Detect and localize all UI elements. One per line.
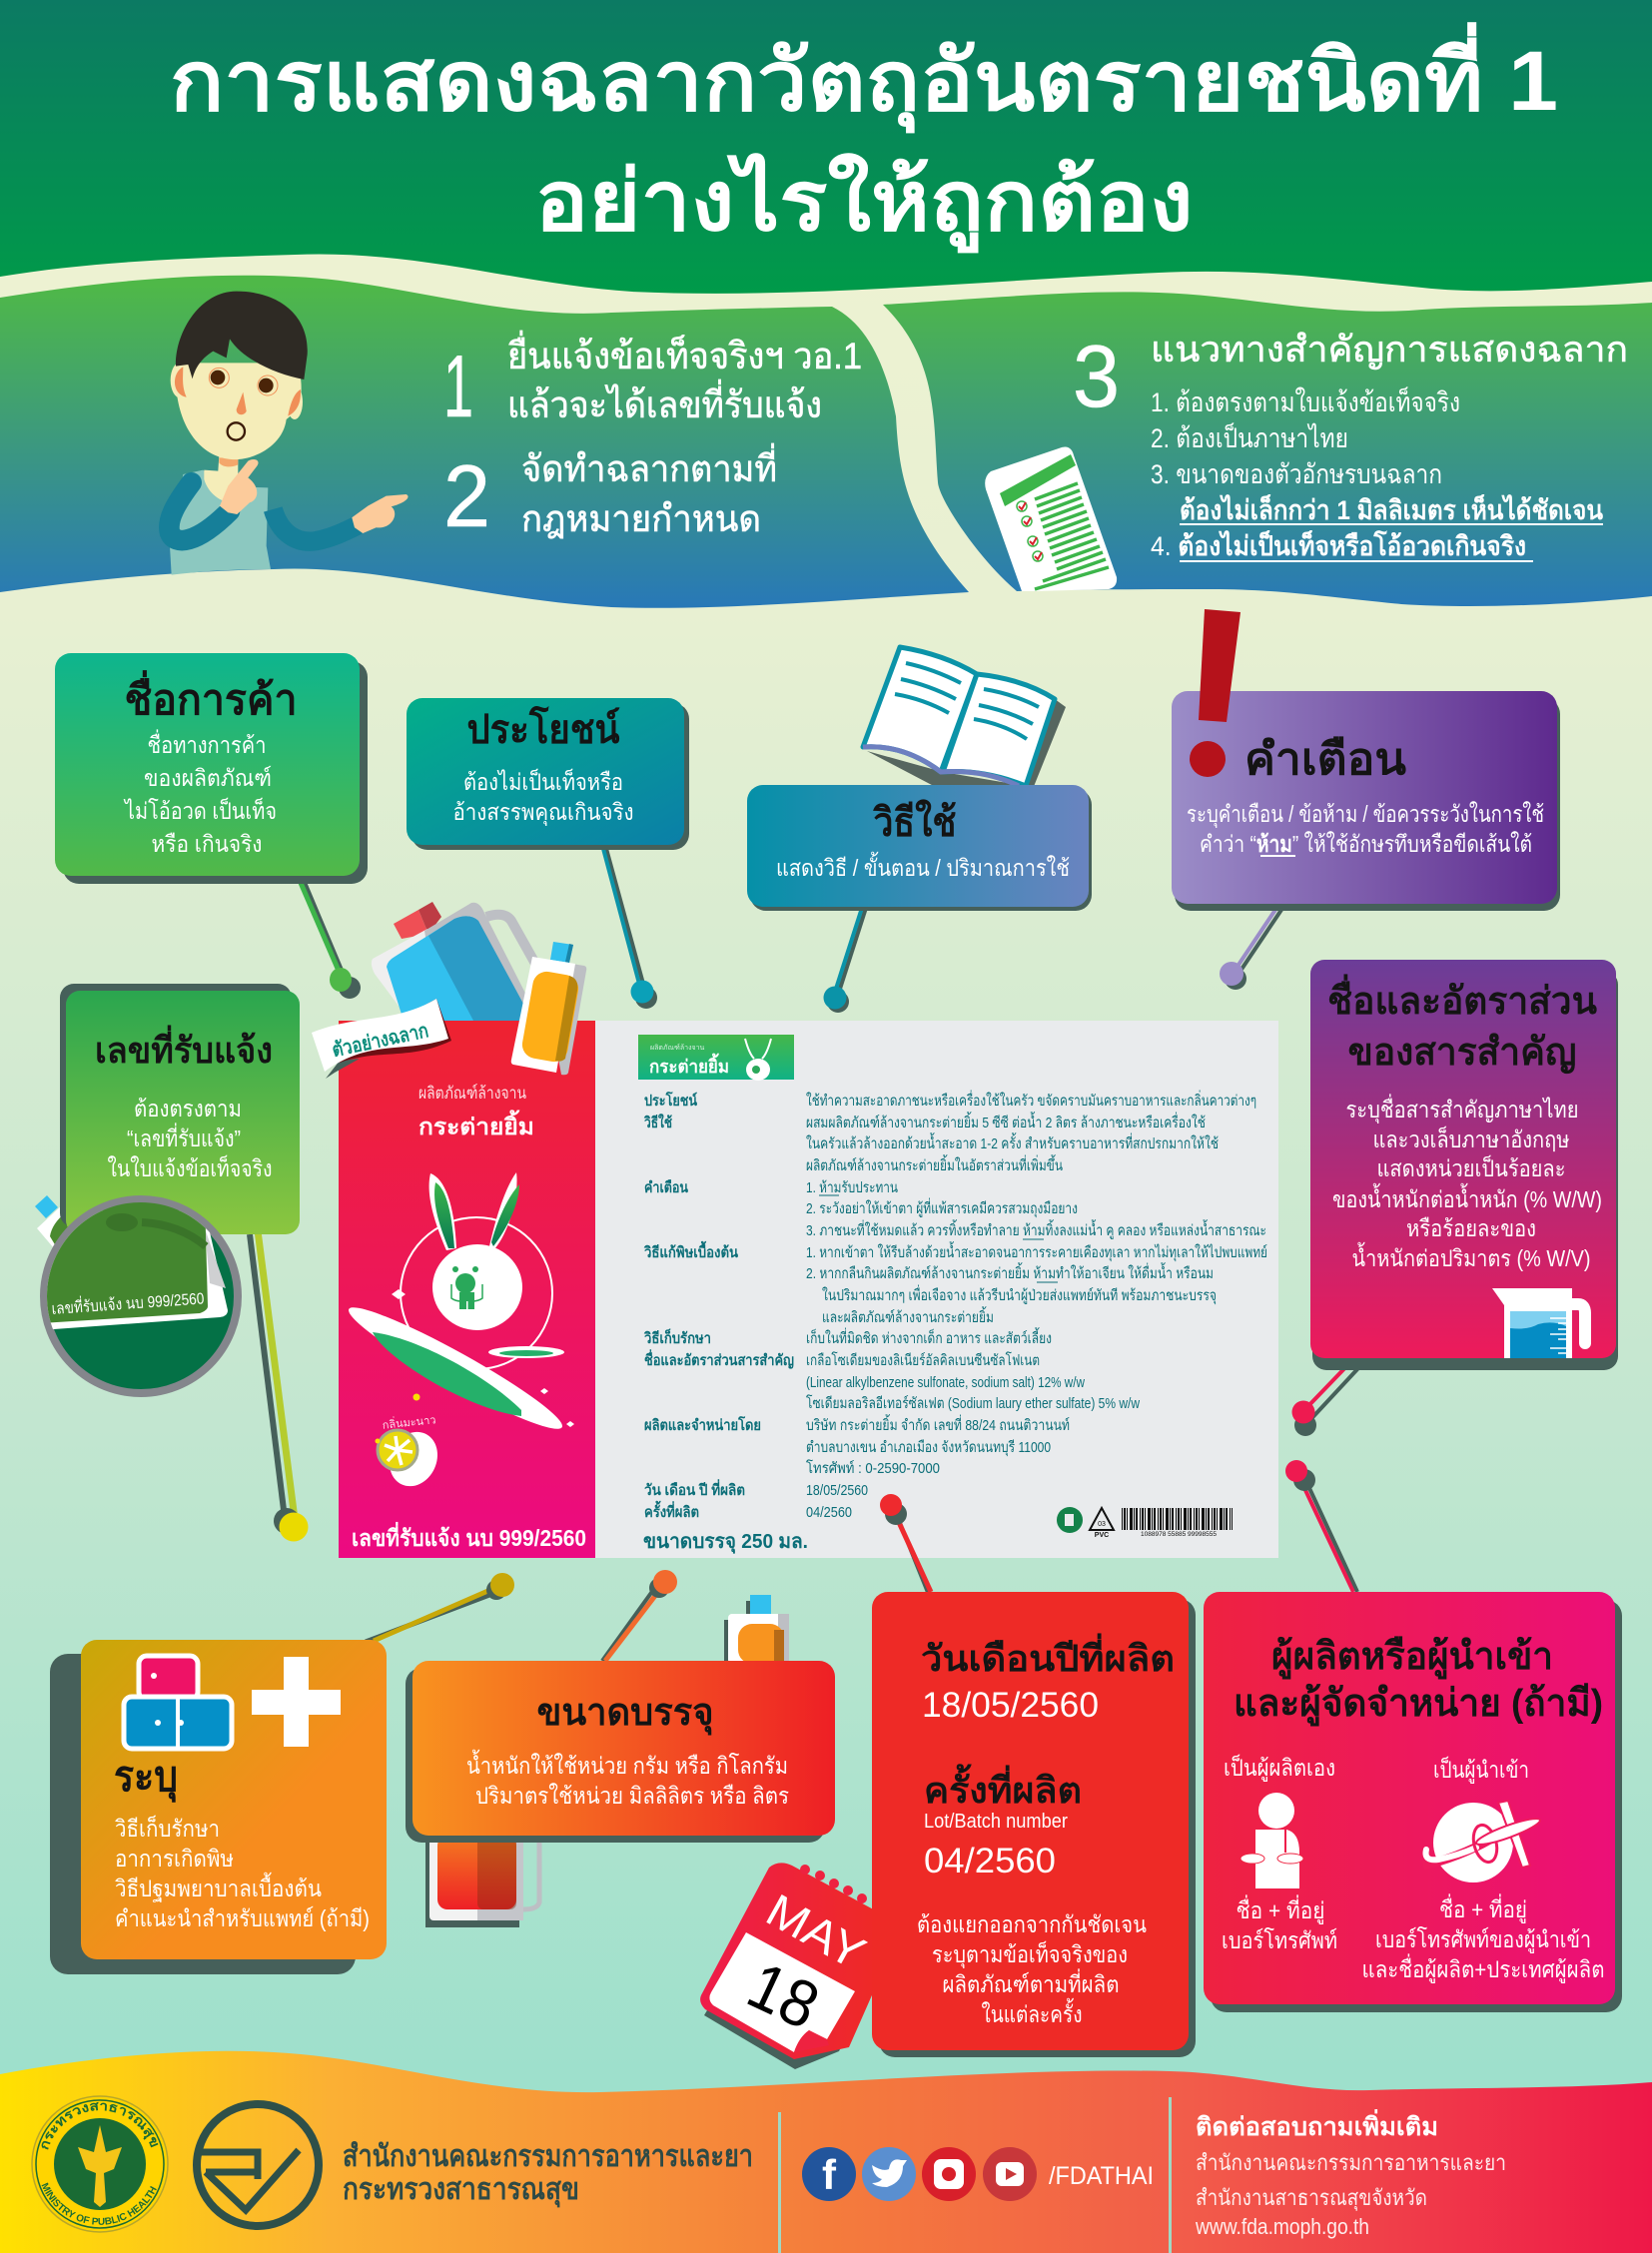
mini brand tag: กระต่ายยิ้ม	[649, 1053, 729, 1077]
icon: manufacturer person	[1240, 1793, 1303, 1888]
connector: trade name	[298, 876, 361, 999]
agency name	[343, 2140, 753, 2208]
icon: pointing character	[169, 292, 409, 575]
panel: notification number: ในใบแจ้งข้อเท็จจริง	[108, 1153, 272, 1181]
agency name: กระทรวงสาธารณสุข	[343, 2173, 579, 2208]
panel: active ingredients	[1310, 960, 1618, 1370]
logo: FDA	[197, 2104, 319, 2226]
contact details	[1195, 2109, 1506, 2239]
ingredient table: details: โซเดียมลอริลอีเทอร์ซัลเฟต (Sodium laury ether sulfate) 5% w/w	[806, 1394, 1140, 1412]
panel: manufacturer or importer: เป็นผู้นำเข้า	[1433, 1755, 1529, 1784]
panel: step 3 guidelines	[883, 292, 1652, 606]
panel: manufacturing date and batch: ต้องแยกออกจากกันชัดเจน	[917, 1911, 1147, 1937]
icon: globe with airplane	[1423, 1801, 1542, 1882]
ingredient table: details: 3. ภาชนะที่ใช้หมดแล้ว ควรทิ้งหรือทำลาย ห้ามทิ้งลงแม่น้ำ คู คลอง หรือแหล่งน้ำสาธารณะ	[806, 1219, 1266, 1239]
panel: steps 1 and 2	[0, 276, 969, 608]
icon: bottle above net content	[724, 1595, 789, 1664]
connector: benefit	[602, 845, 657, 1009]
panel: directions: แสดงวิธี / ขั้นตอน / ปริมาณการใช้	[776, 852, 1070, 881]
guideline list: 3. ขนาดของตัวอักษรบนฉลาก	[1151, 459, 1442, 489]
ingredient table: details	[806, 1090, 1267, 1521]
panel: warning: ระบุคำเตือน / ข้อห้าม / ข้อควรระวังในการใช้	[1187, 801, 1544, 828]
panel: warning: คำว่า “ห้าม” ให้ใช้อักษรทึบหรือขีดเส้นใต้	[1200, 831, 1532, 857]
panel: directions: วิธีใช้	[873, 799, 957, 845]
label: red front panel	[339, 1021, 595, 1558]
ingredient table: details: 2. ระวังอย่าให้เข้าตา ผู้ที่แพ้สารเคมีควรสวมถุงมือยาง	[806, 1197, 1078, 1218]
icon: rabbit on plate	[342, 1172, 574, 1441]
icon: tear-off calendar: 18	[737, 1947, 830, 2043]
panel: net content	[406, 1661, 835, 1843]
logo: ministry of public health: กระทรวงสาธารณสุข	[42, 2101, 158, 2149]
icon: magnifier on registration number: เลขที่รับแจ้ง นบ 999/2560	[51, 1286, 205, 1318]
ingredient table: details: 1. ห้ามรับประทาน	[806, 1179, 898, 1196]
ingredient table: details: เกลือโซเดียมของลิเนียร์อัลคิลเบนซีนซัลโฟเนต	[806, 1351, 1040, 1369]
panel: active ingredients: และวงเล็บภาษาอังกฤษ	[1372, 1125, 1570, 1152]
ingredient table: details: เก็บในที่มิดชิด ห่างจากเด็ก อาหาร และสัตว์เลี้ยง	[806, 1327, 1052, 1347]
panel: active ingredients: ระบุชื่อสารสำคัญภาษาไทย	[1346, 1094, 1578, 1124]
icon: tear-off calendar: MAY	[758, 1883, 874, 1979]
connector: manufacturer	[1285, 1460, 1357, 1592]
icon: recycling marks and barcode: 1088978 55885 99998555	[1141, 1531, 1217, 1538]
panel: manufacturer or importer: ผู้ผลิตหรือผู้นำเข้า	[1271, 1636, 1553, 1680]
panel: manufacturer or importer: เบอร์โทรศัพท์ของผู้นำเข้า	[1375, 1926, 1591, 1953]
icon: recycling marks and barcode: PVC	[1095, 1532, 1109, 1539]
step 2 number: 2	[443, 446, 490, 545]
panel: net content: ขนาดบรรจุ	[537, 1692, 713, 1736]
step 2 text	[521, 442, 777, 539]
step 1 text: ยื่นแจ้งข้อเท็จจริงฯ วอ.1	[507, 330, 862, 376]
panel: manufacturer or importer: ชื่อ + ที่อยู่	[1237, 1894, 1324, 1924]
panel: trade name: ไม่โอ้อวด เป็นเท็จ	[123, 796, 277, 824]
mini brand tag	[638, 1035, 794, 1081]
icon: small orange bottle	[511, 942, 586, 1075]
step 3 number: 3	[1073, 327, 1120, 425]
ingredient table: details: โทรศัพท์ : 0-2590-7000	[806, 1459, 940, 1477]
icon: tear-off calendar	[700, 1863, 879, 2069]
ingredient table: details: 18/05/2560	[806, 1482, 868, 1499]
ingredient table: headings: วิธีแก้พิษเบื้องต้น	[643, 1240, 739, 1261]
panel: manufacturing date and batch: 04/2560	[924, 1842, 1056, 1880]
ingredient table: details: (Linear alkylbenzene sulfonate, sodium salt) 12% w/w	[806, 1374, 1085, 1391]
contact details: สำนักงานคณะกรรมการอาหารและยา	[1196, 2150, 1506, 2175]
contact details: www.fda.moph.go.th	[1195, 2214, 1369, 2239]
step 3 heading: แนวทางสำคัญการแสดงฉลาก	[1151, 329, 1628, 370]
panel: manufacturer or importer: ชื่อ + ที่อยู่	[1439, 1893, 1527, 1923]
step 2 text: กฎหมายกำหนด	[521, 498, 761, 539]
icon: recycling marks and barcode: 03	[1098, 1521, 1106, 1528]
ribbon: sample label tag: ตัวอย่างฉลาก	[331, 1020, 430, 1062]
ingredient table: headings: วัน เดือน ปี ที่ผลิต	[644, 1479, 745, 1499]
ingredient table: headings: ครั้งที่ผลิต	[644, 1500, 699, 1521]
panel: other information: คำแนะนำสำหรับแพทย์ (ถ้ามี)	[115, 1905, 370, 1931]
label: red front panel: กระต่ายยิ้ม	[418, 1110, 534, 1139]
ingredient table: details: ตำบลบางเขน อำเภอเมือง จังหวัดนนทบุรี 11000	[806, 1439, 1051, 1457]
panel: net content: ปริมาตรใช้หน่วย มิลลิลิตร หรือ ลิตร	[475, 1783, 789, 1809]
icon: detergent jug	[372, 902, 539, 1021]
guideline list: 4. ต้องไม่เป็นเท็จหรือโอ้อวดเกินจริง	[1151, 528, 1526, 561]
connector: active ingredients	[1292, 1357, 1358, 1436]
panel: warning: คำเตือน	[1244, 735, 1406, 784]
panel: trade name: หรือ เกินจริง	[152, 831, 262, 857]
panel: manufacturing date and batch: ผลิตภัณฑ์ตามที่ผลิต	[943, 1968, 1119, 1997]
ingredient table: details: ผสมผลิตภัณฑ์ล้างจานกระต่ายยิ้ม 5 ซีซี ต่อน้ำ 2 ลิตร ล้างภาชนะหรือเครื่องใช้	[806, 1112, 1206, 1131]
agency name: สำนักงานคณะกรรมการอาหารและยา	[343, 2140, 753, 2173]
panel: active ingredients: ของน้ำหนักต่อน้ำหนัก (% W/W)	[1332, 1183, 1602, 1212]
title	[170, 22, 1558, 254]
ingredient table: details: ใช้ทำความสะอาดภาชนะหรือเครื่องใช้ในครัว ขจัดคราบมันคราบอาหารและกลิ่นคาวต่างๆ	[806, 1090, 1256, 1110]
step 1 text	[507, 330, 862, 425]
ingredient table: details: ในครัวแล้วล้างออกด้วยน้ำสะอาด 1-2 ครั้ง สำหรับคราบอาหารที่สกปรกมากให้ใช้	[806, 1132, 1219, 1152]
panel: directions	[747, 785, 1092, 911]
mini brand tag: ผลิตภัณฑ์ล้างจาน	[650, 1044, 705, 1052]
social media icons	[802, 2147, 1037, 2201]
icon: measuring jug	[1492, 1288, 1585, 1358]
label: red front panel: เลขที่รับแจ้ง นบ 999/2560	[352, 1521, 586, 1551]
guideline list	[1151, 384, 1603, 562]
sample label	[312, 902, 1278, 1558]
ingredient table: details: 1. หากเข้าตา ให้รีบล้างด้วยน้ำสะอาดจนอาการระคายเคืองทุเลา หากไม่ทุเลาให้ไปพบแพทย์	[806, 1241, 1267, 1262]
panel: manufacturer or importer: เบอร์โทรศัพท์	[1222, 1927, 1337, 1953]
connector: other information	[366, 1573, 514, 1642]
ingredient table: details: ในปริมาณมากๆ เพื่อเจือจาง แล้วรีบนำผู้ป่วยส่งแพทย์ทันที พร้อมภาชนะบรรจุ	[822, 1284, 1217, 1305]
panel: manufacturing date and batch	[872, 1592, 1196, 2057]
panel: active ingredients: หรือร้อยละของ	[1406, 1215, 1536, 1241]
panel: manufacturing date and batch: ในแต่ละครั้ง	[981, 1998, 1083, 2027]
social media icons: f	[822, 2151, 837, 2198]
icon: magnifier on registration number	[40, 1198, 238, 1393]
panel: manufacturer or importer: เป็นผู้ผลิตเอง	[1224, 1753, 1335, 1782]
icon: lemon	[376, 1394, 446, 1494]
panel: manufacturing date and batch: ครั้งที่ผลิต	[924, 1764, 1082, 1811]
guideline list: 1. ต้องตรงตามใบแจ้งข้อเท็จจริง	[1151, 384, 1460, 417]
icon: storage cabinet and first aid cross	[124, 1656, 341, 1749]
icon: exclamation mark	[1190, 609, 1240, 777]
panel: net content: น้ำหนักให้ใช้หน่วย กรัม หรือ กิโลกรัม	[466, 1750, 788, 1779]
step 2 text: จัดทำฉลากตามที่	[521, 442, 777, 489]
icon: jar below net content	[425, 1836, 539, 1927]
panel: manufacturer or importer	[1204, 1592, 1622, 2012]
panel: other information	[50, 1640, 387, 1974]
label: red front panel: ผลิตภัณฑ์ล้างจาน	[418, 1084, 526, 1103]
connector: date of manufacture	[880, 1494, 931, 1595]
panel: benefit: ต้องไม่เป็นเท็จหรือ	[463, 767, 623, 795]
ingredient table: details: บริษัท กระต่ายยิ้ม จำกัด เลขที่ 88/24 ถนนติวานนท์	[806, 1414, 1070, 1434]
panel: manufacturing date and batch: Lot/Batch number	[924, 1811, 1068, 1833]
panel: notification number: “เลขที่รับแจ้ง”	[127, 1123, 241, 1151]
panel: manufacturer or importer: และผู้จัดจำหน่าย (ถ้ามี)	[1234, 1683, 1603, 1727]
icon: recycling marks and barcode	[1057, 1507, 1233, 1539]
icon: lemon: กลิ่นมะนาว	[382, 1411, 436, 1432]
panel: benefit: ประโยชน์	[467, 706, 620, 752]
guideline list: ต้องไม่เล็กกว่า 1 มิลลิเมตร เห็นได้ชัดเจน	[1180, 492, 1603, 525]
step 1 text: แล้วจะได้เลขที่รับแจ้ง	[507, 378, 822, 425]
logo: ministry of public health	[31, 2095, 169, 2233]
ingredient table: headings: ขนาดบรรจุ 250 มล.	[643, 1531, 808, 1554]
panel: active ingredients: ชื่อและอัตราส่วน	[1327, 974, 1597, 1023]
ingredient table: headings: คำเตือน	[644, 1179, 689, 1196]
ingredient table: details: และผลิตภัณฑ์ล้างจานกระต่ายยิ้ม	[822, 1306, 994, 1326]
guideline list: 2. ต้องเป็นภาษาไทย	[1151, 420, 1348, 453]
panel: manufacturing date and batch: 18/05/2560	[922, 1686, 1099, 1725]
ingredient table: headings: ประโยชน์	[644, 1091, 698, 1110]
connector: net content	[602, 1570, 677, 1661]
panel: notification number: เลขที่รับแจ้ง	[95, 1025, 273, 1071]
title: อย่างไรให้ถูกต้อง	[535, 153, 1193, 254]
ingredient table: details: 2. หากกลืนกินผลิตภัณฑ์ล้างจานกระต่ายยิ้ม ห้ามทำให้อาเจียน ให้ดื่มน้ำ หรือนม	[806, 1262, 1214, 1282]
connector: warning	[1220, 904, 1283, 990]
panel: benefit: อ้างสรรพคุณเกินจริง	[453, 799, 633, 826]
ingredient table: details: 04/2560	[806, 1504, 852, 1521]
social handle: /FDATHAI	[1049, 2162, 1154, 2190]
panel: trade name: ของผลิตภัณฑ์	[144, 765, 272, 791]
panel: trade name: ชื่อการค้า	[124, 670, 298, 723]
panel: manufacturing date and batch: วันเดือนปีที่ผลิต	[921, 1633, 1175, 1679]
panel: other information: ระบุ	[114, 1753, 178, 1803]
panel: manufacturing date and batch: ระบุตามข้อเท็จจริงของ	[932, 1939, 1128, 1968]
panel: other information: วิธีปฐมพยาบาลเบื้องต้น	[115, 1873, 322, 1902]
footer band	[0, 2051, 1652, 2253]
panel: active ingredients: น้ำหนักต่อปริมาตร (% W/V)	[1352, 1242, 1590, 1271]
contact details: ติดต่อสอบถามเพิ่มเติม	[1196, 2109, 1438, 2141]
panel: trade name: ชื่อทางการค้า	[148, 729, 266, 758]
panel: active ingredients: ของสารสำคัญ	[1348, 1032, 1576, 1074]
ingredient table: details: ผลิตภัณฑ์ล้างจานกระต่ายยิ้มในอัตราส่วนที่เพิ่มขึ้น	[806, 1154, 1063, 1174]
logo: ministry of public health: MINISTRY OF PUBLIC HEALTH	[42, 2183, 157, 2225]
connector: notification number	[250, 1234, 308, 1542]
connector: directions	[823, 908, 866, 1013]
panel: trade name	[55, 653, 368, 884]
panel: notification number: ต้องตรงตาม	[134, 1096, 242, 1122]
ribbon: sample label tag	[312, 999, 451, 1079]
icon: checklist document	[985, 447, 1117, 591]
step 1 number: 1	[443, 337, 473, 435]
contact details: สำนักงานสาธารณสุขจังหวัด	[1196, 2185, 1427, 2211]
panel: active ingredients: แสดงหน่วยเป็นร้อยละ	[1376, 1153, 1566, 1181]
ingredient table: headings: วิธีใช้	[644, 1114, 672, 1131]
panel: notification number	[60, 984, 300, 1234]
ingredient table: headings	[643, 1091, 808, 1554]
ingredient table: headings: ชื่อและอัตราส่วนสารสำคัญ	[644, 1349, 794, 1369]
label: information panel	[595, 1021, 1278, 1558]
ingredient table: headings: ผลิตและจำหน่ายโดย	[644, 1415, 761, 1434]
title: การแสดงฉลากวัตถุอันตรายชนิดที่ 1	[170, 22, 1558, 134]
panel: other information: วิธีเก็บรักษา	[115, 1814, 220, 1842]
icon: bottle behind magnifier	[35, 1195, 85, 1248]
icon: open book	[863, 647, 1066, 799]
panel: benefit	[407, 698, 689, 850]
header band	[0, 0, 1652, 294]
panel: other information: อาการเกิดพิษ	[115, 1846, 234, 1872]
panel: warning	[1172, 609, 1560, 911]
panel: manufacturer or importer: และชื่อผู้ผลิต+ประเทศผู้ผลิต	[1362, 1953, 1604, 1983]
ingredient table: headings: วิธีเก็บรักษา	[643, 1328, 711, 1347]
